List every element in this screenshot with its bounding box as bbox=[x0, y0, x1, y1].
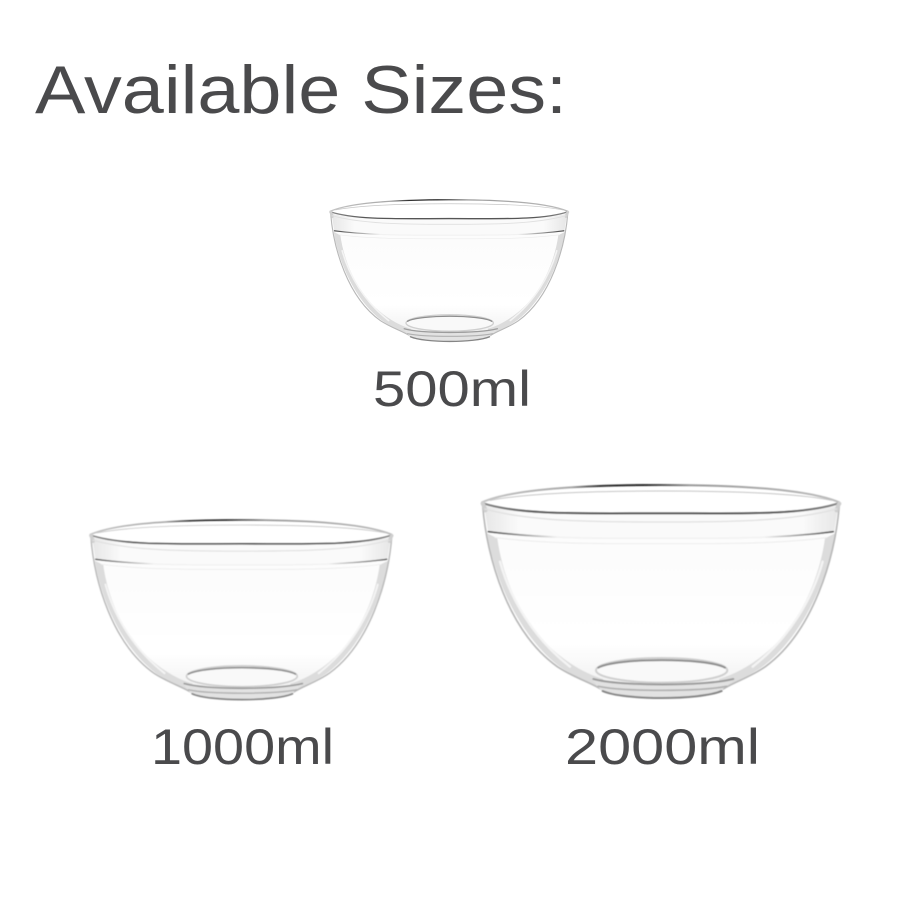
label: 1000ml: 1000ml bbox=[151, 719, 334, 775]
title: Available Sizes: bbox=[35, 52, 567, 128]
icon: 2000ml glass bowl bbox=[482, 485, 839, 698]
label: 2000ml: 2000ml bbox=[565, 719, 760, 775]
icon: 500ml glass bowl bbox=[330, 200, 568, 341]
label: 500ml: 500ml bbox=[373, 361, 531, 417]
icon: 1000ml glass bowl bbox=[90, 520, 392, 700]
